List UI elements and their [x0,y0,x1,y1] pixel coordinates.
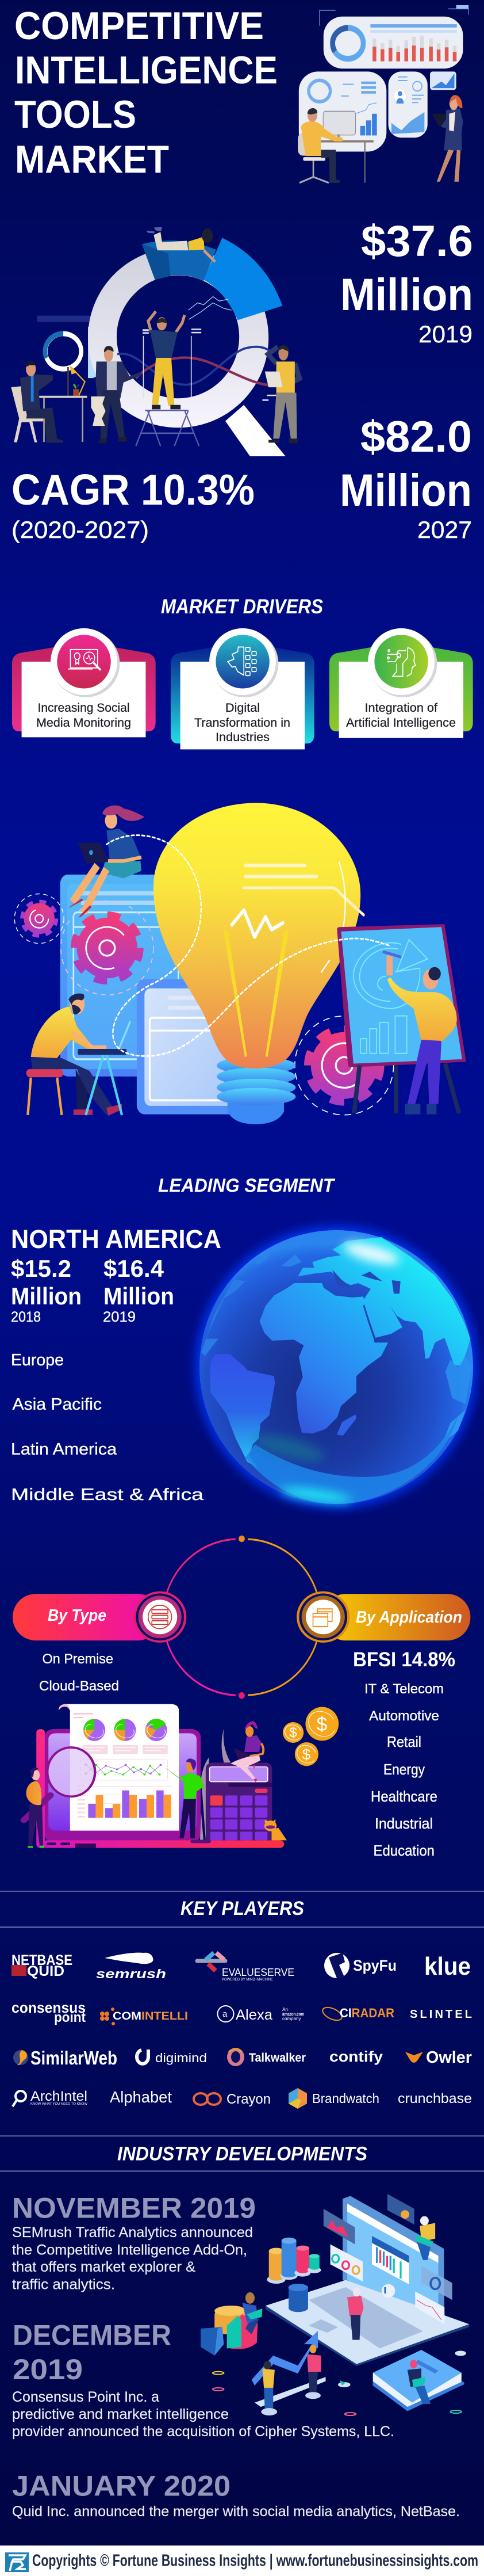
logo: alexa: company [282,2016,301,2021]
logo: digimind [137,2050,207,2065]
logo: contify: contify [329,2048,383,2065]
title: INTELLIGENCE [15,48,278,92]
CAGR: CAGR 10.3% [11,465,255,514]
development: January 2020: JANUARY 2020 [12,2470,231,2502]
development: November 2019: NOVEMBER 2019 [12,2192,256,2224]
coin dollar signs: $ [317,1713,328,1735]
segment ring with type and application pills: By Application [356,1608,462,1627]
by type list: On Premise [43,1651,113,1667]
title: MARKET [15,138,169,181]
market size 2019: $37.6 [361,217,473,266]
logo: alphabet: Alphabet [110,2088,172,2106]
logo: alexa [217,2006,304,2023]
logo: archintel [13,2089,88,2106]
card: digital transformation [171,628,314,749]
market size 2019 [340,217,473,348]
logo: cyradar: CIRADAR [340,2006,394,2020]
logo: comintelli [100,2008,188,2025]
logo: crayon: Crayon [226,2092,271,2107]
card: artificial intelligence: Integration of [364,701,437,715]
region list: Asia Pacific [13,1395,102,1414]
illustration: tablet report, calculator and coins [24,1704,341,1848]
logo: netbase quid [11,1952,72,1979]
North America 2018 value: Million [11,1283,82,1310]
logo: owler [405,2048,472,2067]
development: November 2019 [12,2192,256,2292]
icon: Fortune Business Insights logo [5,2552,29,2572]
logo: crunchbase: crunchbase [398,2091,472,2106]
logo: comintelli: COM INTELLI [113,2010,188,2022]
logo: brandwatch: Brandwatch [312,2091,379,2106]
by application list: Education [374,1842,435,1859]
by application list: Energy [383,1761,425,1778]
heading: leading segment: LEADING SEGMENT [158,1175,336,1196]
card: social media monitoring: Media Monitoring [36,716,131,730]
North America 2019 value: Million [103,1283,174,1310]
icon: globe [195,1226,477,1508]
by application list: BFSI 14.8% [353,1648,455,1671]
North America 2019 value: $16.4 [103,1255,164,1282]
region list: NORTH AMERICA [11,1224,221,1254]
heading: market drivers: MARKET DRIVERS [161,596,323,618]
coin dollar signs: $ [289,1725,297,1741]
logo: archintel: KNOW WHAT YOU NEED TO KNOW [30,2102,88,2106]
logo: evalueserve: EVALUESERVE [222,1967,294,1978]
by application list: Healthcare [371,1788,437,1805]
logo: evalueserve [197,1953,294,1982]
card: artificial intelligence: Artificial Intelligence [346,716,456,730]
logo: archintel: ArchIntel [30,2089,87,2104]
North America 2018 value: 2018 [11,1309,41,1325]
development: November 2019: the Competitive Intelligence Add-On, [12,2242,247,2258]
CAGR [11,465,255,543]
card: artificial intelligence [329,628,473,738]
coin dollar signs: $ [302,1746,311,1763]
market size 2027 [340,413,472,543]
illustration: light bulb with team [14,803,466,1124]
by type list [39,1651,119,1694]
logo: klue: klue [424,1952,471,1980]
logo: crayon [194,2092,271,2107]
logo: spyfu [324,1953,397,1978]
logo: alexa: a [222,2009,228,2019]
logo: talkwalker: Talkwalker [249,2051,306,2064]
region list [11,1224,221,1504]
development: December 2019 [12,2319,394,2440]
region list: Europe [11,1351,64,1369]
development: January 2020: Quid Inc. announced the merger with social media analytics, NetBase. [12,2504,460,2520]
development: November 2019: SEMrush Traffic Analytics announced [12,2224,253,2241]
logo: cyradar [321,2005,394,2023]
logo: brandwatch [289,2088,379,2109]
logo: alexa: amazon.com [282,2012,304,2017]
development: December 2019: DECEMBER [13,2319,171,2352]
heading: key players: KEY PLAYERS [180,1898,304,1919]
market size 2027: Million [340,464,472,516]
logo: slintel: SLINTEL [410,2008,472,2021]
CAGR: (2020-2027) [11,516,149,543]
logo: consensus point: point [54,2010,86,2025]
illustration: isometric laptop with analysts [201,2194,469,2415]
North America 2018 value: $15.2 [11,1255,71,1282]
footer [0,2546,484,2576]
logo: semrush: semrush [96,1967,166,1981]
market size 2027: $82.0 [360,413,472,461]
logo: consensus point [11,1999,86,2025]
logo: netbase quid: QUID [27,1963,64,1979]
region list: Middle East & Africa [11,1486,204,1504]
development: January 2020 [12,2470,460,2520]
segment ring with type and application pills: By Type [48,1606,106,1625]
development: December 2019: 2019 [13,2353,83,2386]
by type list: Cloud-Based [39,1678,119,1694]
North America 2019 value [103,1255,174,1325]
development: November 2019: traffic analytics. [12,2276,115,2292]
panel: market driver cards [12,628,473,749]
card: digital transformation: Industries [216,731,270,744]
logo: alexa: Alexa [236,2007,272,2023]
title: TOOLS [14,93,136,136]
logo: evalueserve: POWERED BY MIND+MACHINE [222,1978,273,1982]
logo: spyfu: SpyFu [353,1957,397,1974]
title [14,4,278,181]
card: digital transformation: Transformation in [194,716,290,730]
North America 2018 value [11,1255,82,1325]
logo: owler: Owler [426,2048,472,2067]
by application list: Retail [387,1733,421,1750]
logo: alexa: An [282,2007,288,2012]
logo: semrush [96,1953,166,1981]
logo: digimind: digimind [155,2051,207,2065]
segment ring with type and application pills [13,1536,470,1699]
development: December 2019: predictive and market intelligence [12,2406,229,2422]
heading: industry developments: INDUSTRY DEVELOPMENTS [117,2143,367,2165]
card: social media monitoring [12,628,156,737]
illustration: analytics dashboards with analyst and presenter [298,5,468,183]
logo: similarweb: SimilarWeb [30,2047,117,2069]
market size 2019: Million [340,269,473,320]
coin dollar signs [289,1713,328,1763]
by application list: IT & Telecom [364,1681,444,1697]
logo: consensus point: consensus [11,1999,86,2016]
card: digital transformation: Digital [225,701,260,715]
development: December 2019: Consensus Point Inc. a [12,2389,159,2405]
development: December 2019: provider announced the acquisition of Cipher Systems, LLC. [12,2424,394,2440]
market size 2019: 2019 [418,320,473,348]
panel: key player logos [11,1952,472,2109]
title: COMPETITIVE [14,4,264,48]
market size 2027: 2027 [417,516,472,543]
development: November 2019: that offers market explorer & [12,2259,195,2275]
by application list: Industrial [375,1815,433,1832]
logo: talkwalker [227,2048,306,2066]
by application list [353,1648,455,1859]
card: social media monitoring: Increasing Social [38,701,130,715]
North America 2019 value: 2019 [103,1309,136,1325]
logo: netbase quid: NETBASE [11,1952,72,1968]
illustration: magnifying glass with analysts [11,227,299,456]
by application list: Automotive [369,1708,439,1724]
region list: Latin America [11,1440,117,1459]
